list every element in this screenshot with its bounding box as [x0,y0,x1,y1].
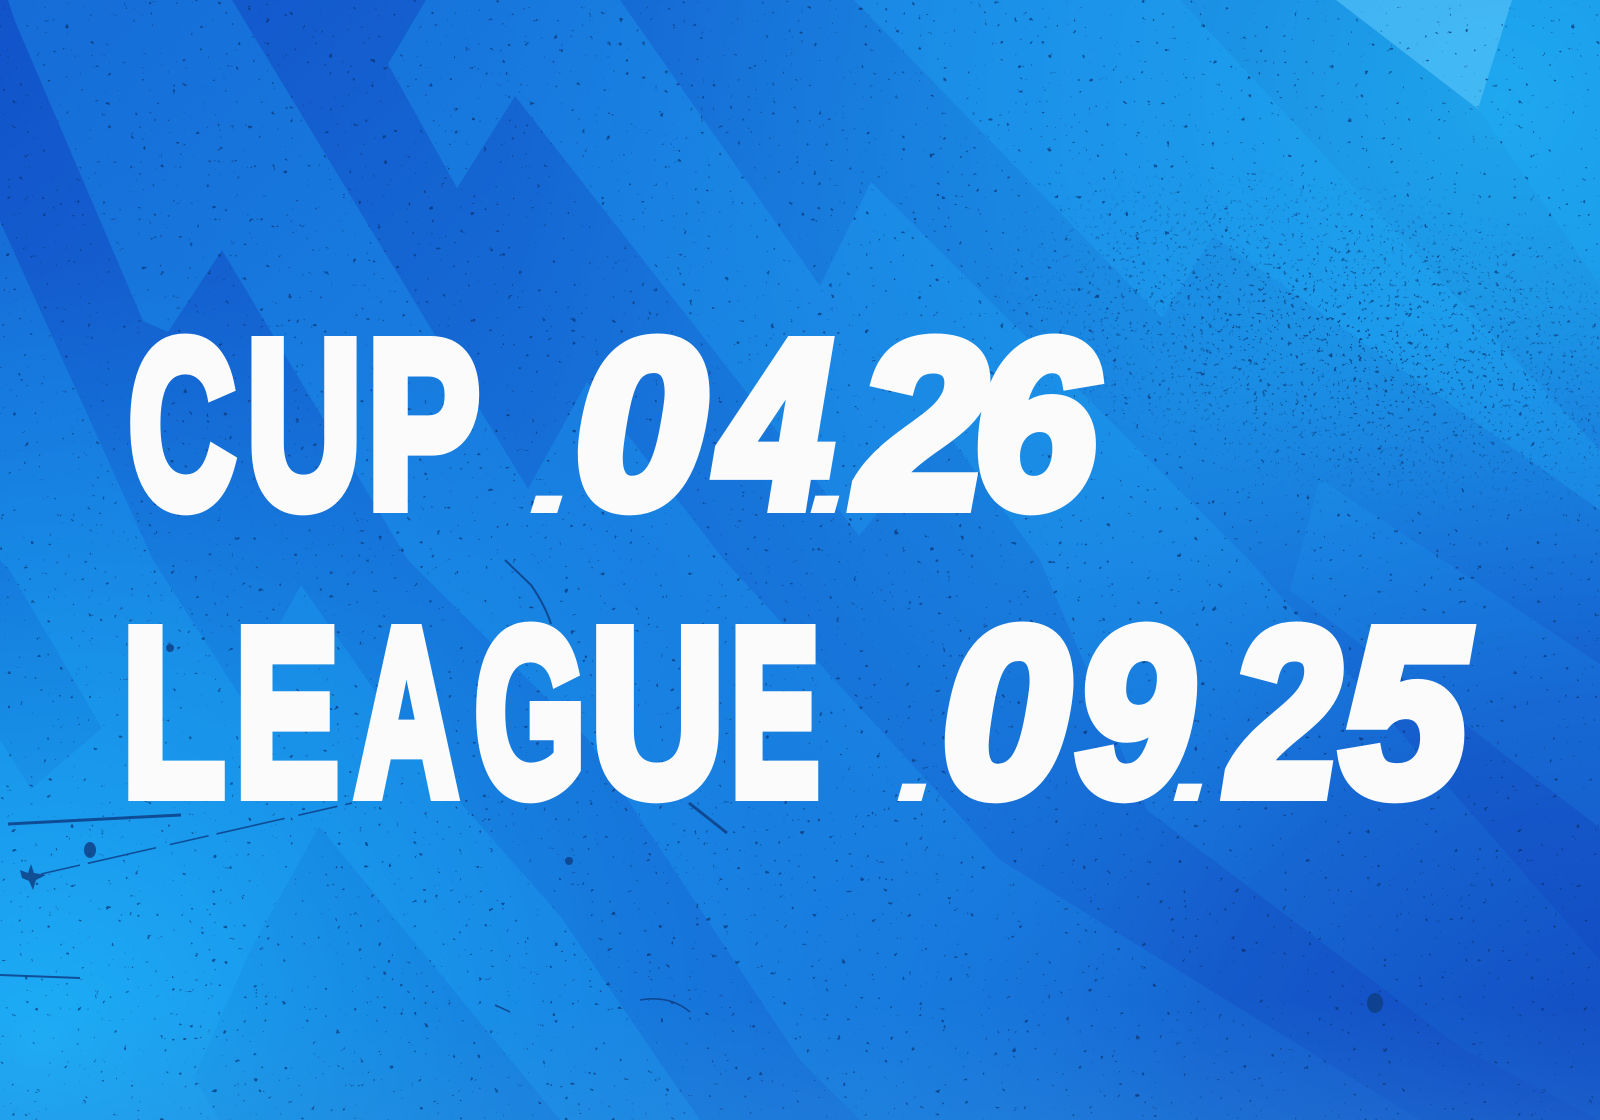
title line: LEAGUE .09.25: L [122,580,225,845]
title line: CUP .04.26 [128,292,1098,557]
title line: CUP .04.26: P [367,292,480,557]
title line: LEAGUE .09.25: 2 [1227,580,1340,845]
title line: LEAGUE .09.25: . [1174,719,1210,819]
title line: LEAGUE .09.25: 9 [1076,580,1192,845]
title line: CUP .04.26: C [128,292,236,557]
title line: LEAGUE .09.25: E [235,580,339,845]
title line: LEAGUE .09.25: 5 [1342,580,1469,845]
title line: CUP .04.26: . [811,431,847,531]
title line: CUP .04.26: . [531,431,571,531]
title line: LEAGUE .09.25: G [474,580,586,845]
bottom haze [0,1000,1600,1120]
title line: CUP .04.26: U [247,292,362,557]
title line: CUP .04.26: 0 [575,292,705,557]
scratches [0,560,727,1012]
scratch blots [20,644,1383,1013]
title line: LEAGUE .09.25: A [355,580,458,845]
title line: CUP .04.26: 4 [717,292,832,557]
title line: LEAGUE .09.25: U [590,580,724,845]
title line: CUP .04.26: 6 [974,292,1098,557]
title line: LEAGUE .09.25: . [898,719,934,819]
title line: LEAGUE .09.25: E [730,580,820,845]
title line: LEAGUE .09.25: 0 [942,580,1069,845]
light corner triangle [1336,0,1512,109]
title line: LEAGUE .09.25 [122,580,1469,845]
title line: CUP .04.26: 2 [854,292,986,557]
